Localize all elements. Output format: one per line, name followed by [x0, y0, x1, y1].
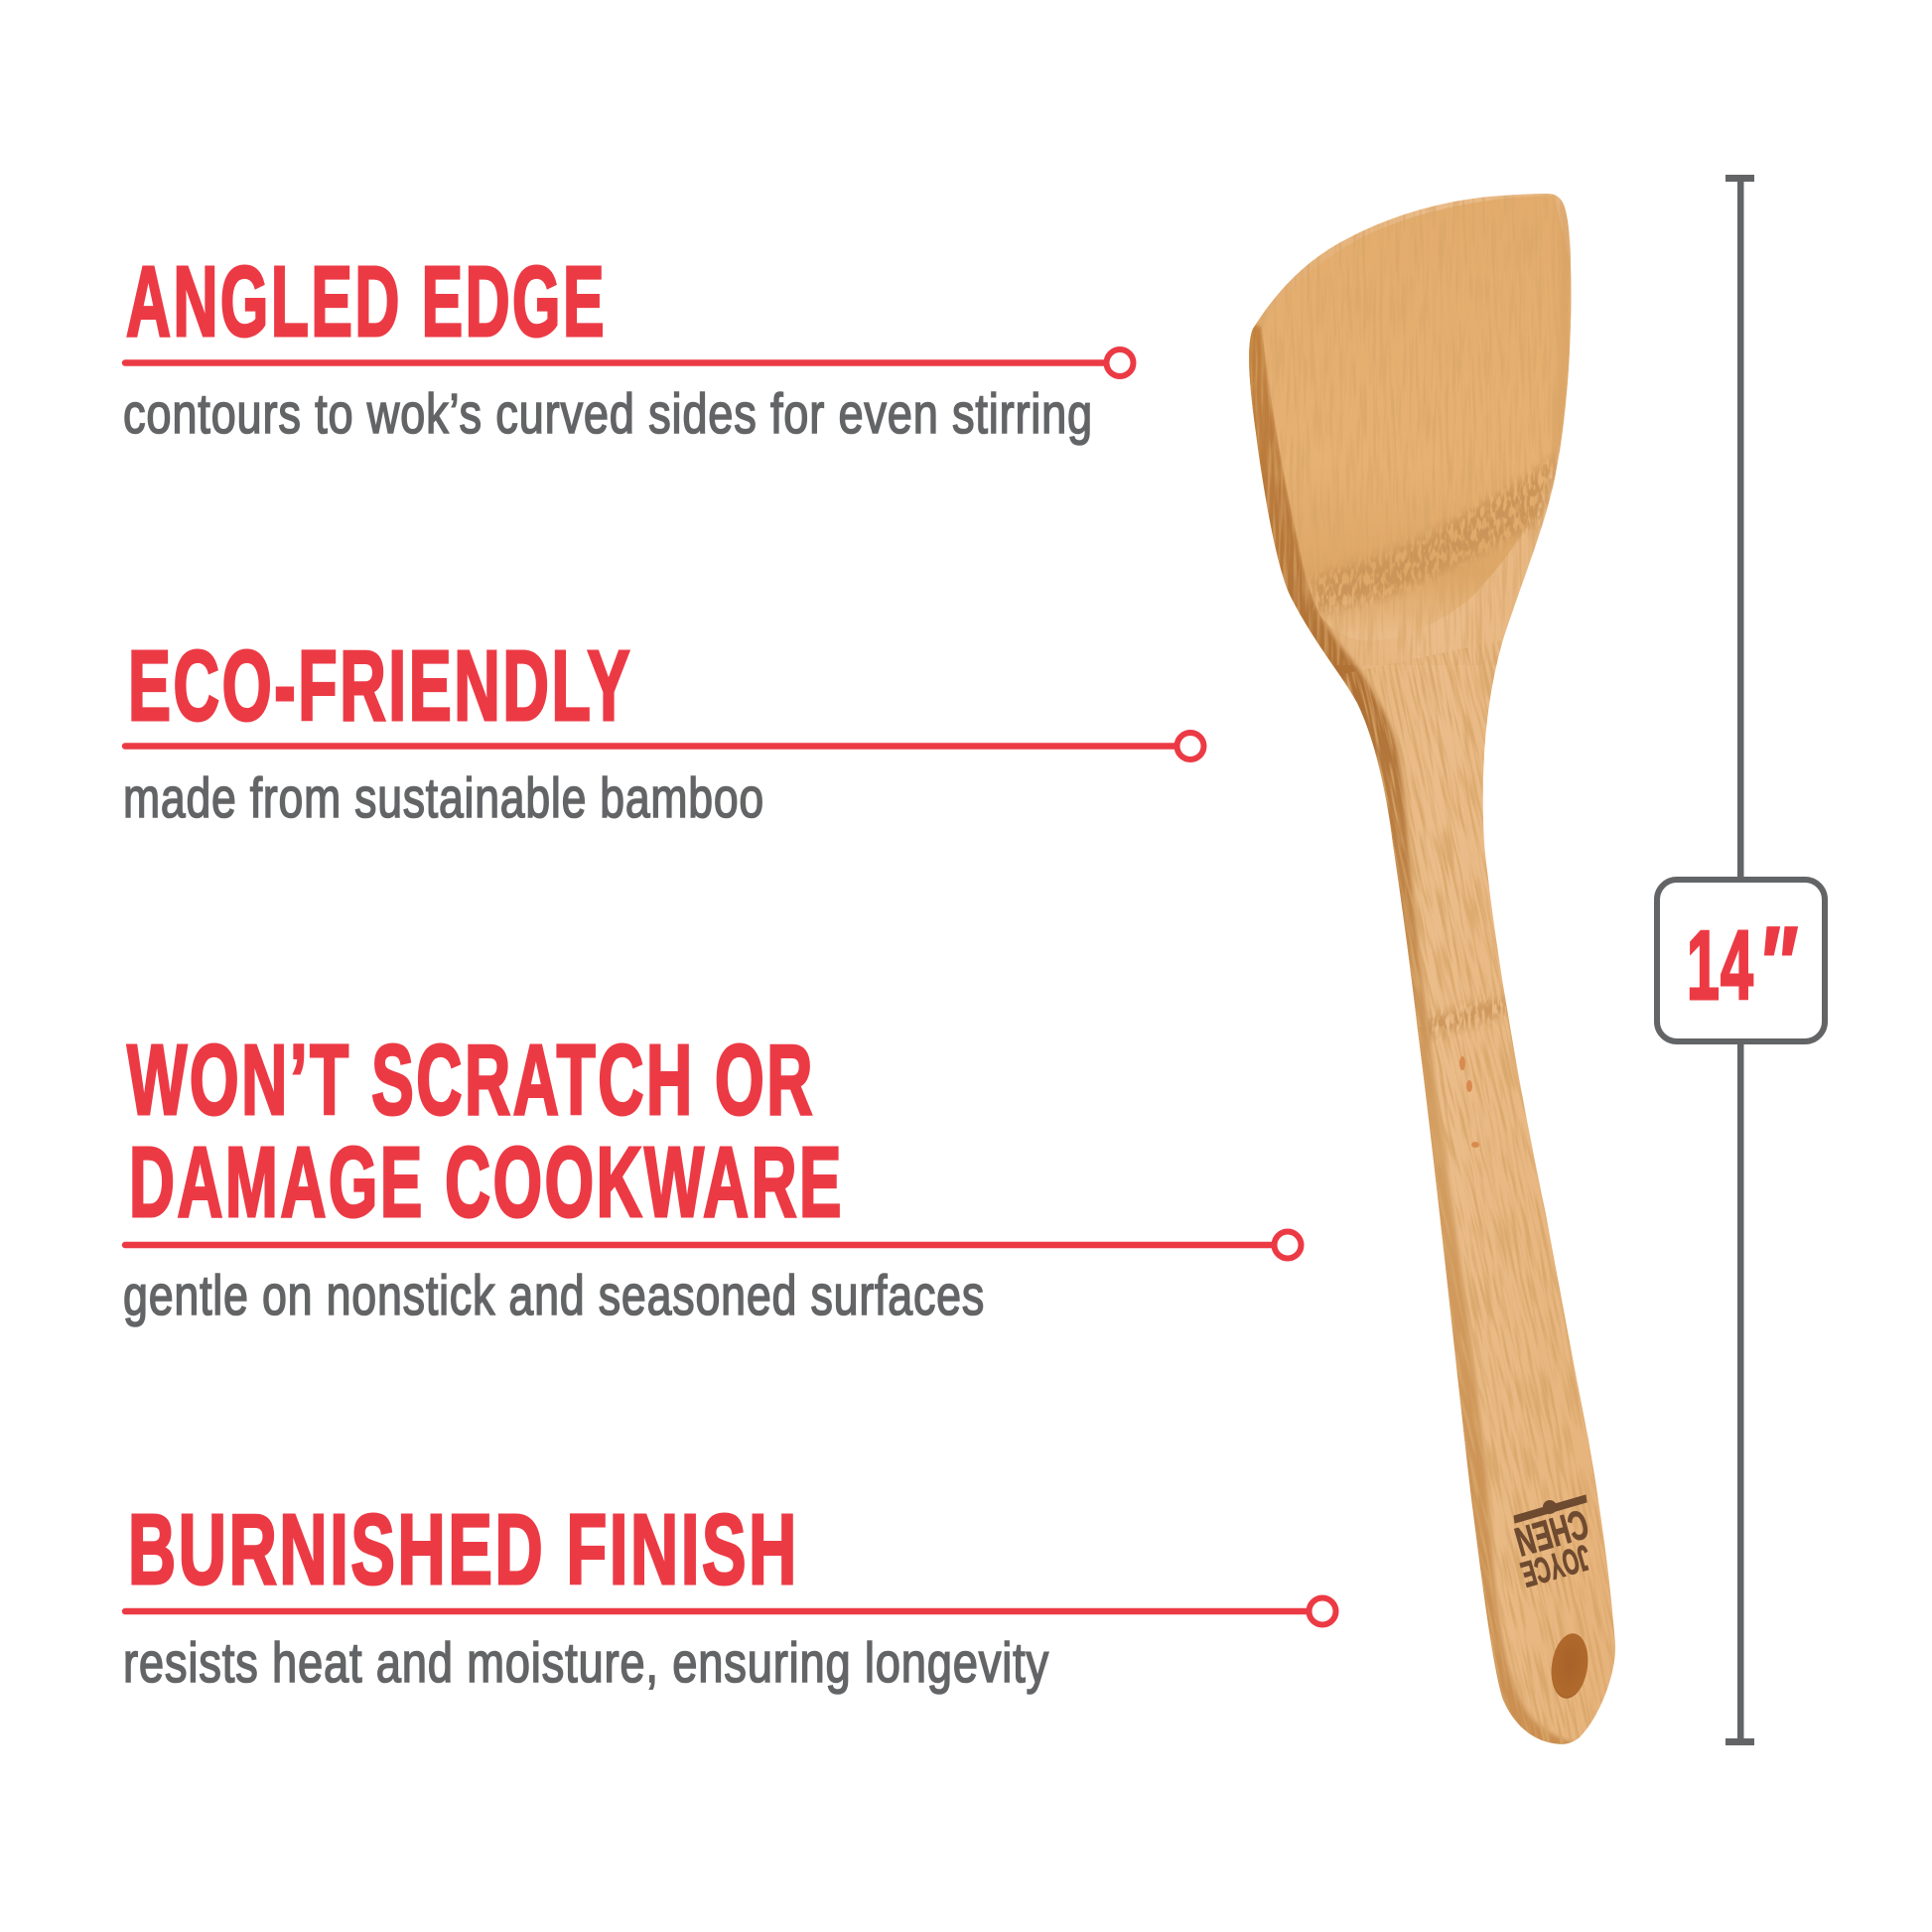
description: won't scratch: gentle on nonstick and seasoned surfaces: [123, 1264, 985, 1327]
feature: angled edge: [123, 246, 1134, 446]
leader line: eco-friendly: [125, 733, 1203, 759]
feature: eco-friendly: [123, 630, 1203, 830]
leader line: burnished finish: [125, 1598, 1336, 1624]
bamboo node band on blade: [1311, 452, 1561, 614]
description: burnished finish: resists heat and moisture, ensuring longevity: [123, 1631, 1049, 1695]
description: angled edge: contours to wok’s curved sides for even stirring: [123, 382, 1093, 446]
bamboo spatula: [1249, 194, 1616, 1744]
logo word: joyce: JOYCE: [1517, 1537, 1594, 1595]
dimension line: [1725, 175, 1754, 1745]
hanging hole: [1548, 1631, 1591, 1701]
wood base: [1241, 189, 1628, 1752]
heading: won't scratch or damage cookware: [127, 1025, 844, 1238]
orange grain spots: [1459, 1056, 1479, 1148]
feature: burnished finish: [123, 1494, 1336, 1695]
logo badge: [1543, 1501, 1557, 1513]
right rim shade: [1555, 204, 1567, 467]
heading: won't scratch or damage cookware: DAMAGE COOKWARE: [129, 1127, 844, 1238]
description: eco-friendly: made from sustainable bamboo: [123, 766, 764, 830]
bowl face: [1262, 196, 1579, 640]
heading: eco-friendly: ECO-FRIENDLY: [128, 630, 632, 742]
engraved logo: [1510, 1495, 1594, 1595]
leader line: angled edge: [125, 349, 1134, 376]
heading: won't scratch or damage cookware: WON’T SCRATCH OR: [127, 1025, 815, 1136]
size value: ″: [1758, 906, 1797, 1022]
logo word: chen: CHEN: [1510, 1501, 1593, 1565]
heading: angled edge: ANGLED EDGE: [126, 246, 607, 357]
wood grain: handle: [1344, 641, 1615, 1744]
size badge: [1657, 880, 1825, 1041]
leader line: won't scratch: [125, 1231, 1301, 1259]
left bevel edge: [1231, 318, 1579, 1777]
size value: 14: [1687, 910, 1754, 1020]
wood grain: blade: [1241, 189, 1584, 665]
heading: burnished finish: BURNISHED FINISH: [128, 1494, 799, 1605]
logo bar: [1514, 1495, 1587, 1523]
bamboo node band on handle: [1415, 995, 1511, 1040]
feature: won't scratch: [123, 1025, 1301, 1327]
